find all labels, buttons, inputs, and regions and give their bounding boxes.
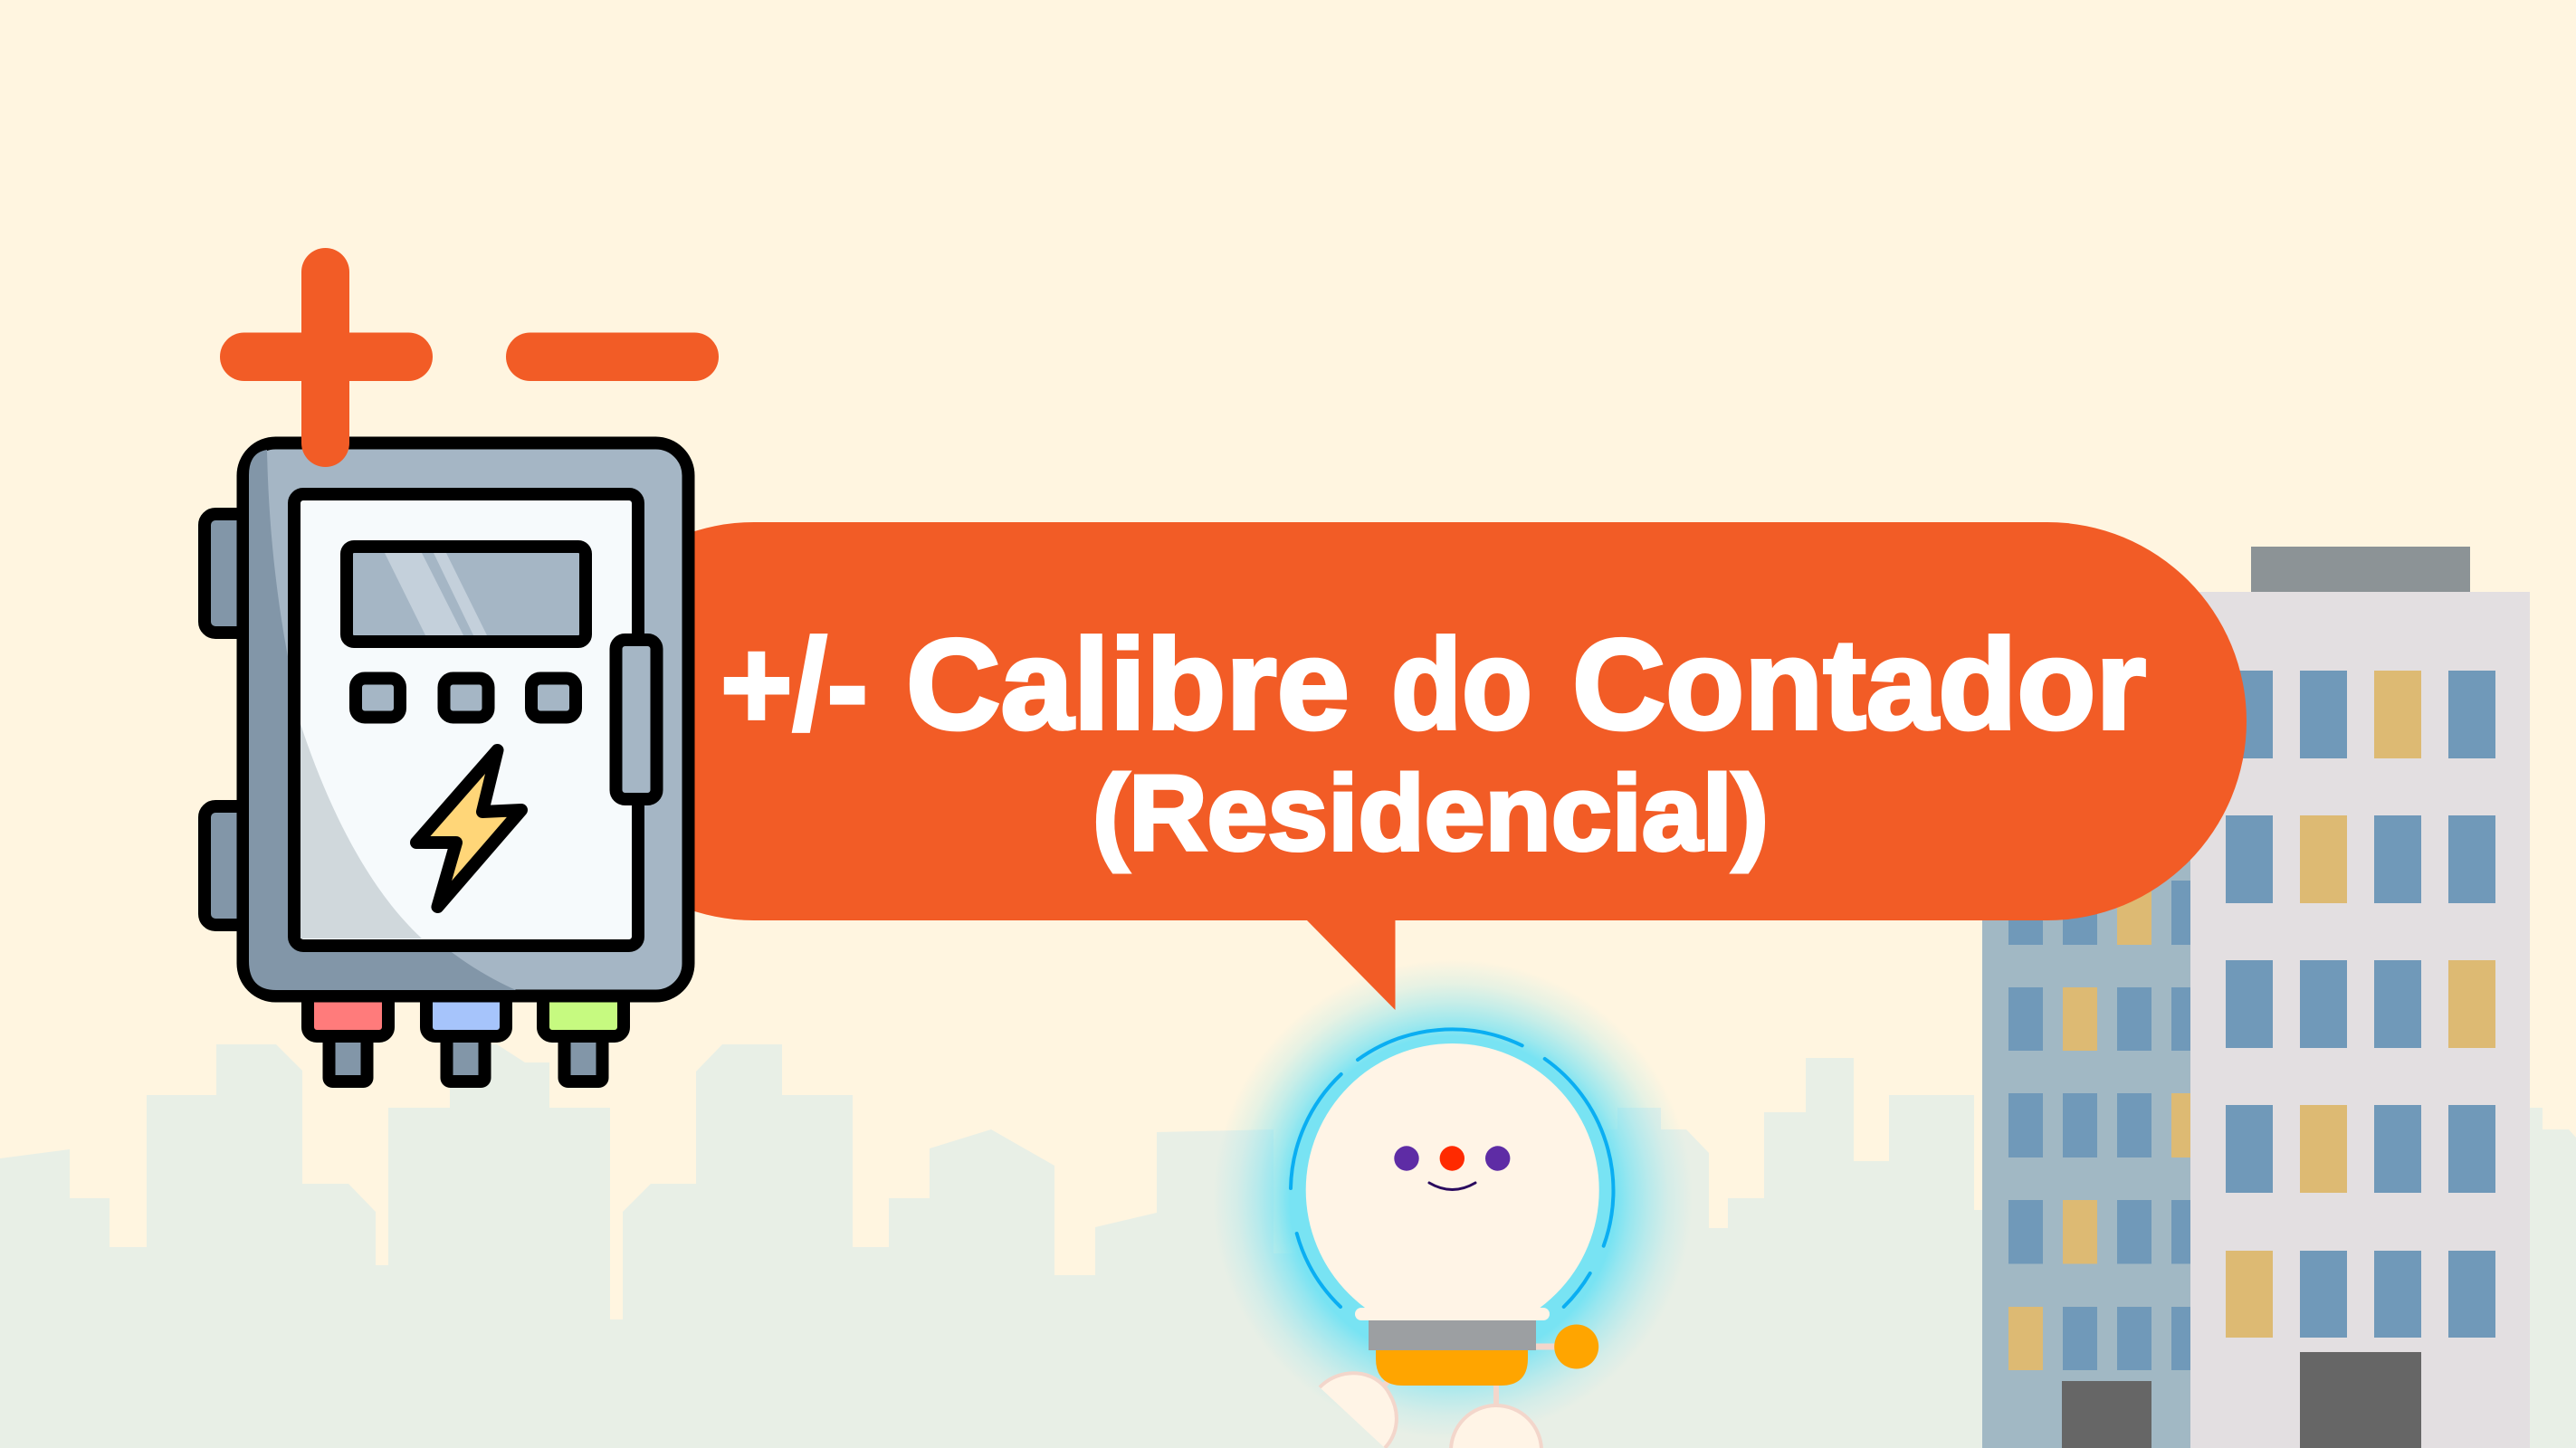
back building	[1982, 851, 2206, 1448]
meter screen	[347, 547, 586, 642]
meter body	[243, 443, 688, 996]
meter panel	[294, 494, 638, 946]
icon: lightning bolt	[416, 750, 521, 907]
title: Calibre	[906, 613, 1350, 757]
meter buttons	[356, 679, 576, 717]
robot glow	[1213, 959, 1693, 1439]
title: Contador	[1572, 613, 2146, 757]
icon: minus sign	[506, 333, 719, 381]
robot character	[1291, 1029, 1613, 1448]
front building windows	[2226, 671, 2495, 1338]
robot halo ring	[1291, 1029, 1613, 1307]
meter bottom connectors	[308, 982, 624, 1081]
city skyline silhouette	[0, 1044, 2576, 1448]
back building door	[2062, 1381, 2151, 1448]
robot right foot	[1451, 1386, 1541, 1448]
front building	[2190, 547, 2530, 1448]
robot head	[1306, 1043, 1599, 1337]
title: +/-	[720, 613, 868, 757]
title: do	[1391, 613, 1532, 757]
meter panel shading	[301, 724, 422, 938]
icon: electric meter	[205, 443, 688, 1081]
front building door	[2300, 1352, 2421, 1448]
subtitle: (Residencial)	[1092, 754, 1769, 873]
robot body	[1376, 1350, 1528, 1386]
meter latch	[615, 640, 657, 799]
robot arm	[1530, 1325, 1598, 1368]
meter body shading	[249, 450, 516, 990]
meter left tabs	[205, 514, 250, 925]
title	[720, 613, 2146, 757]
back building windows	[2008, 881, 2206, 1370]
icon: plus sign	[220, 248, 433, 467]
speech bubble tail	[1306, 919, 1396, 1010]
speech bubble	[555, 522, 2247, 1010]
robot collar	[1369, 1320, 1536, 1350]
front building roof	[2251, 547, 2470, 592]
robot left foot	[1320, 1373, 1397, 1448]
robot face	[1394, 1146, 1510, 1189]
